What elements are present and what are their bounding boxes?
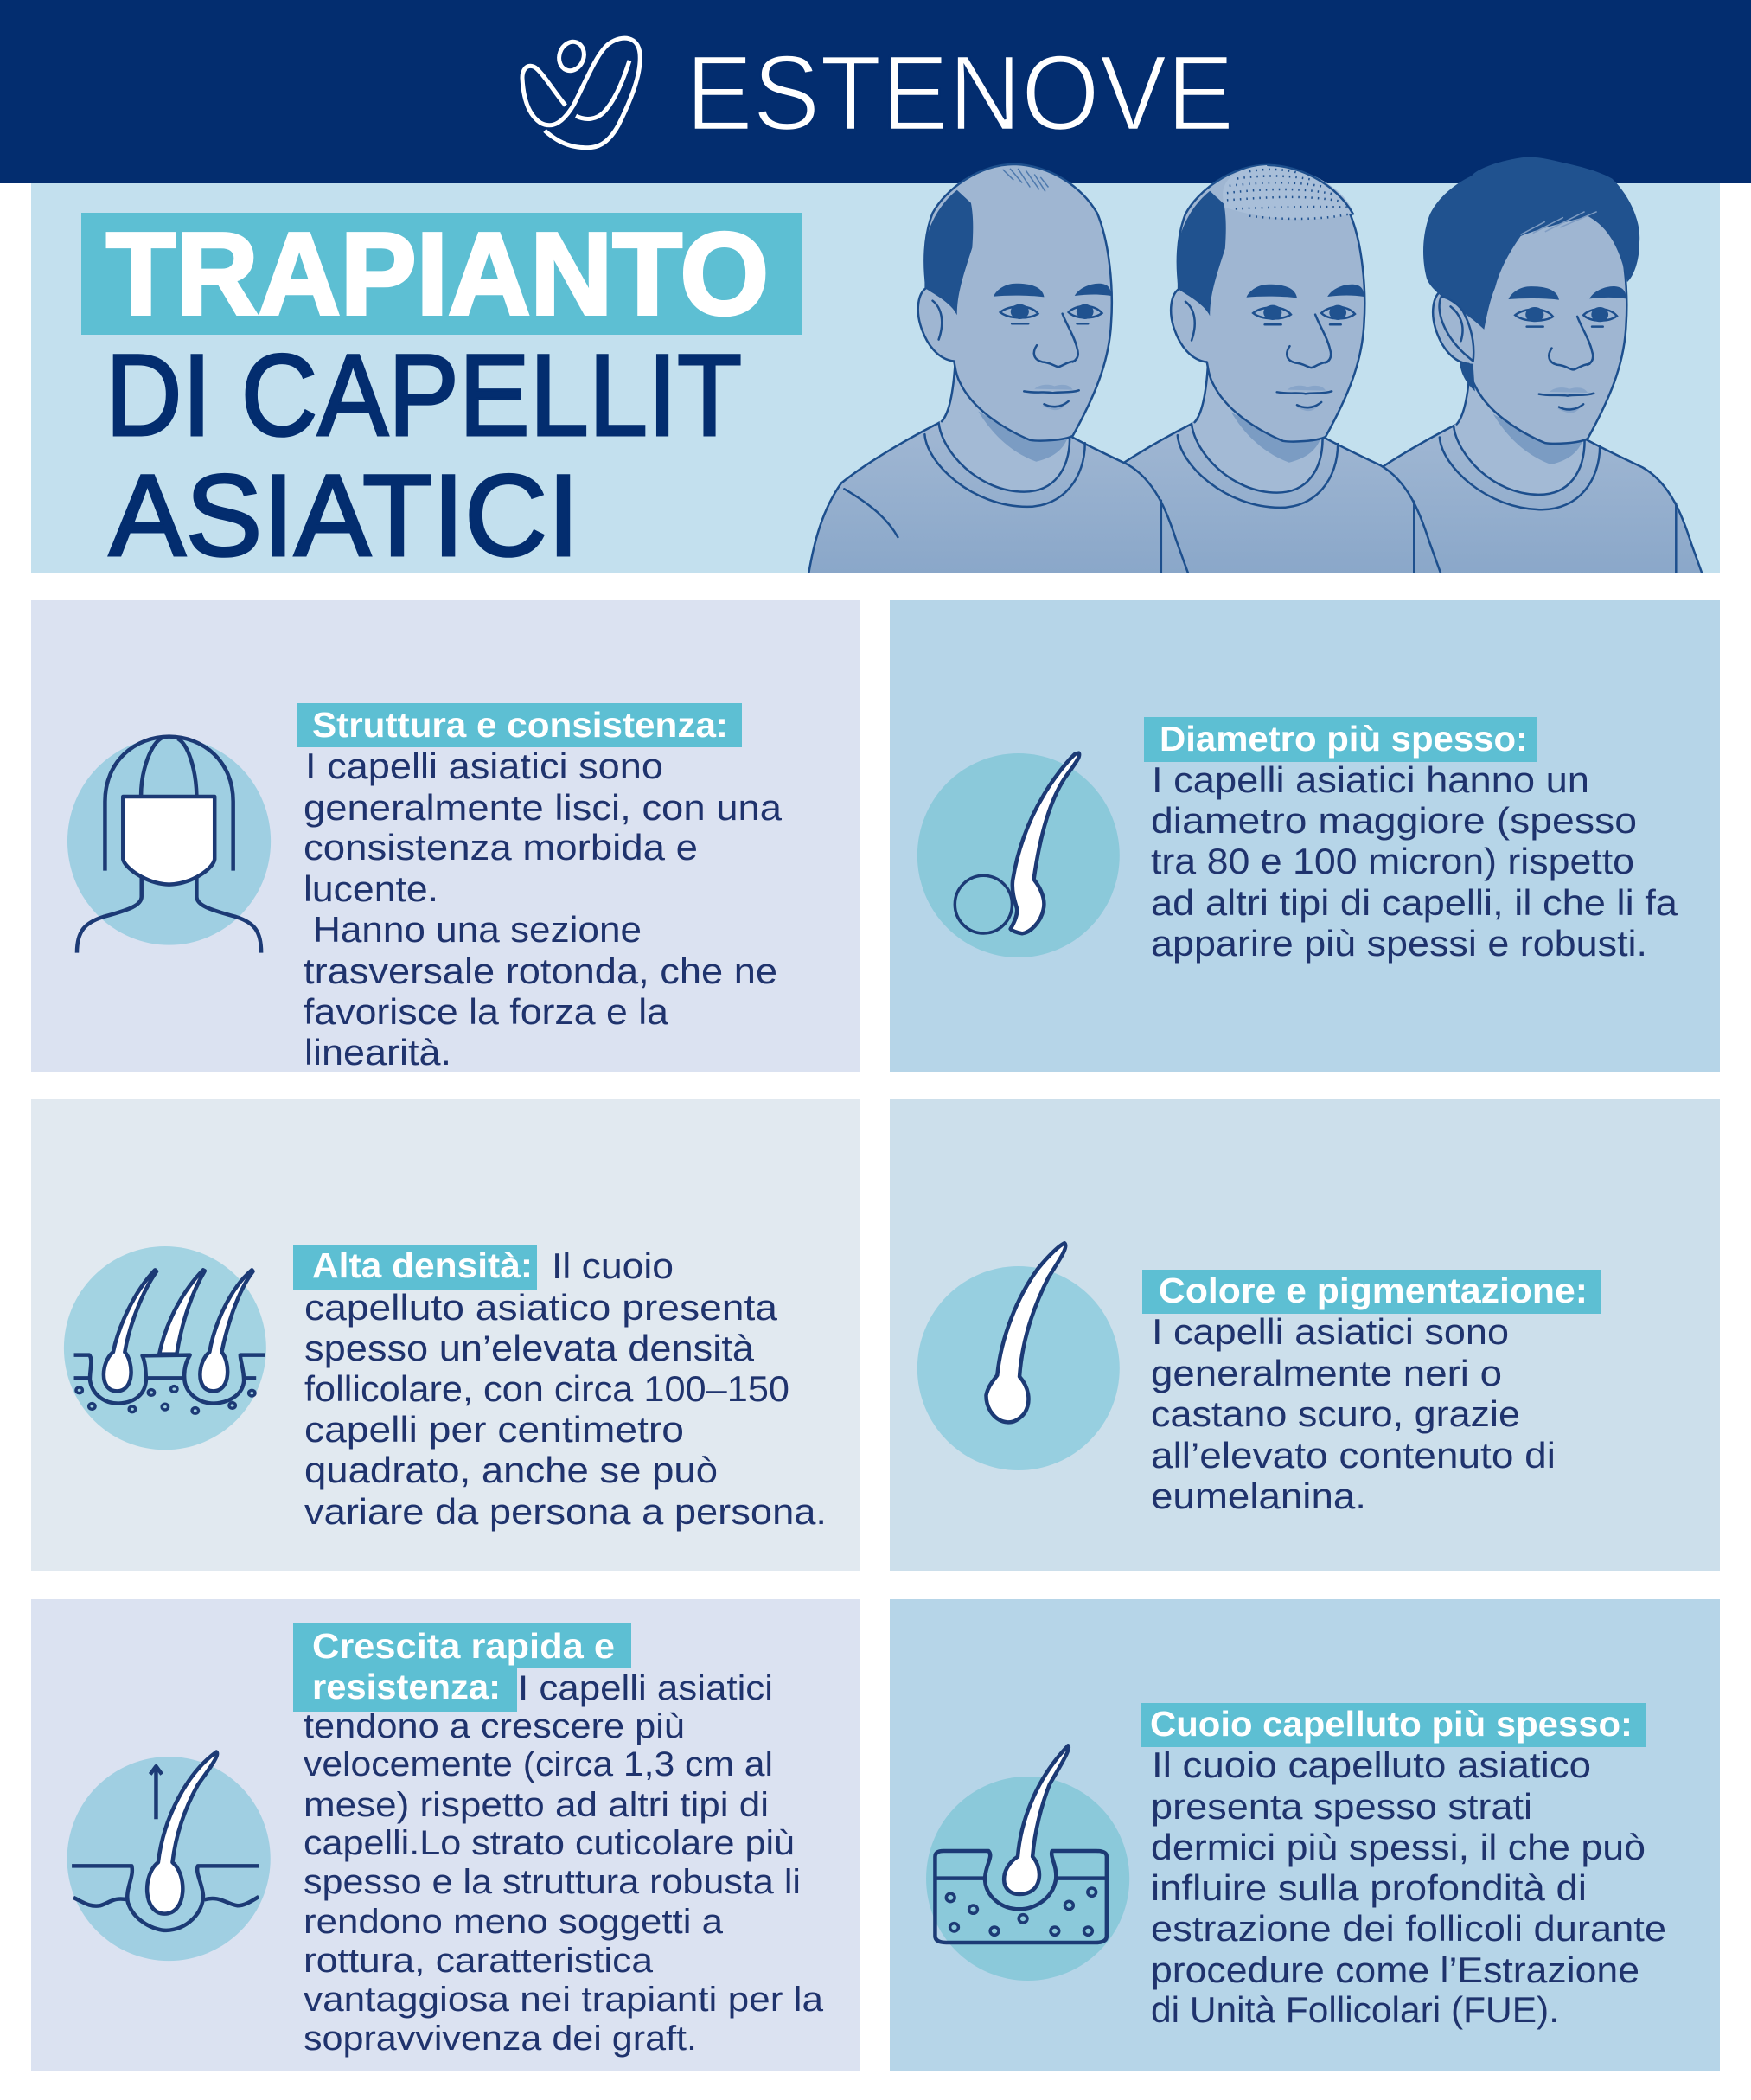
heading: Diametro più spesso: xyxy=(1160,719,1528,759)
body text: I capelli asiatici hanno un xyxy=(1152,759,1589,800)
heading: Struttura e consistenza: xyxy=(312,705,728,745)
body text: spesso un’elevata densità xyxy=(304,1328,755,1368)
body text: lucente. xyxy=(304,868,438,909)
arrow xyxy=(150,1766,162,1819)
header band xyxy=(0,0,1751,183)
body text: I capelli asiatici sono xyxy=(1152,1311,1509,1352)
body text: velocemente (circa 1,3 cm al xyxy=(304,1745,773,1783)
body text xyxy=(1151,759,1678,964)
heading: Cuoio capelluto più spesso: xyxy=(1150,1704,1633,1744)
body text: castano scuro, grazie xyxy=(1151,1393,1520,1434)
icon: hair growth with arrow xyxy=(67,1752,271,1961)
heading: Crescita rapida e xyxy=(312,1626,615,1666)
body text: apparire più spessi e robusti. xyxy=(1151,923,1647,964)
heading: Alta densità: xyxy=(312,1245,533,1285)
body text: mese) rispetto ad altri tipi di xyxy=(304,1786,769,1824)
body text xyxy=(304,1669,824,2058)
body text: linearità. xyxy=(304,1032,451,1072)
body text: tra 80 e 100 micron) rispetto xyxy=(1151,841,1634,881)
body text: di Unità Follicolari (FUE). xyxy=(1151,1989,1559,2030)
body text: generalmente lisci, con una xyxy=(304,787,783,828)
body text: diametro maggiore (spesso xyxy=(1151,800,1637,841)
body text: spesso e la struttura robusta li xyxy=(304,1863,801,1901)
man with full hair xyxy=(1383,157,1703,573)
man with thinning hair xyxy=(1124,164,1442,573)
logo icon xyxy=(522,38,640,148)
man with bald crown xyxy=(808,164,1191,579)
body text xyxy=(304,1245,827,1532)
body text: presenta spesso strati xyxy=(1151,1786,1532,1827)
body text: ad altri tipi di capelli, il che li fa xyxy=(1151,882,1678,923)
panel: hero background xyxy=(31,183,1720,573)
body text: quadrato, anche se può xyxy=(304,1450,718,1490)
icon: three follicles in skin xyxy=(64,1246,266,1450)
body text: trasversale rotonda, che ne xyxy=(304,951,777,991)
panel: crescita rapida e resistenza xyxy=(31,1599,860,2071)
panel: alta densità xyxy=(31,1099,860,1571)
body text: follicolare, con circa 100–150 xyxy=(304,1368,789,1409)
body text: influire sulla profondità di xyxy=(1151,1867,1587,1908)
panel: diametro più spesso xyxy=(890,600,1720,1072)
body text: tendono a crescere più xyxy=(304,1707,685,1745)
body text: Hanno una sezione xyxy=(313,909,642,950)
body text: Il cuoio xyxy=(552,1245,674,1286)
body text: eumelanina. xyxy=(1151,1476,1366,1516)
body text xyxy=(1151,1745,1666,2030)
body text: I capelli asiatici sono xyxy=(305,746,663,786)
body text: Il cuoio capelluto asiatico xyxy=(1152,1745,1591,1785)
heading: Colore e pigmentazione: xyxy=(1159,1271,1588,1310)
body text: favorisce la forza e la xyxy=(304,991,669,1032)
title: DI CAPELLIT xyxy=(105,331,742,460)
icon: woman with straight hair xyxy=(67,737,271,953)
heading xyxy=(293,1623,631,1712)
icon: thick hair with cross section xyxy=(917,753,1120,957)
body text: rendono meno soggetti a xyxy=(304,1903,724,1941)
body text: rottura, caratteristica xyxy=(304,1942,654,1980)
heading: resistenza: xyxy=(312,1667,501,1706)
body text: I capelli asiatici xyxy=(518,1669,773,1707)
title xyxy=(81,208,802,580)
title: ASIATICI xyxy=(109,451,579,580)
panel: cuoio capelluto più spesso xyxy=(890,1599,1720,2071)
logo wordmark: ESTENOVE xyxy=(686,35,1234,153)
panel: struttura e consistenza xyxy=(31,600,860,1072)
body text: capelli.Lo strato cuticolare più xyxy=(304,1824,795,1862)
body text: consistenza morbida e xyxy=(304,827,698,868)
body text xyxy=(1151,1311,1556,1516)
illustration: three men, hair progression xyxy=(808,157,1705,582)
body text: procedure come l’Estrazione xyxy=(1151,1950,1639,1990)
body text: vantaggiosa nei trapianti per la xyxy=(304,1981,824,2019)
body text: generalmente neri o xyxy=(1151,1353,1502,1393)
body text xyxy=(304,746,783,1072)
body text: sopravvivenza dei graft. xyxy=(304,2020,697,2058)
body text: estrazione dei follicoli durante xyxy=(1151,1908,1666,1949)
title: TRAPIANTO xyxy=(106,208,769,339)
body text: all’elevato contenuto di xyxy=(1151,1435,1556,1476)
icon: hair in thick skin block xyxy=(926,1745,1129,1981)
body text: variare da persona a persona. xyxy=(304,1491,827,1532)
body text: capelli per centimetro xyxy=(304,1409,684,1450)
body text: capelluto asiatico presenta xyxy=(304,1287,778,1328)
icon: single hair xyxy=(917,1243,1120,1470)
panel: colore e pigmentazione xyxy=(890,1099,1720,1571)
body text: dermici più spessi, il che può xyxy=(1151,1827,1646,1867)
